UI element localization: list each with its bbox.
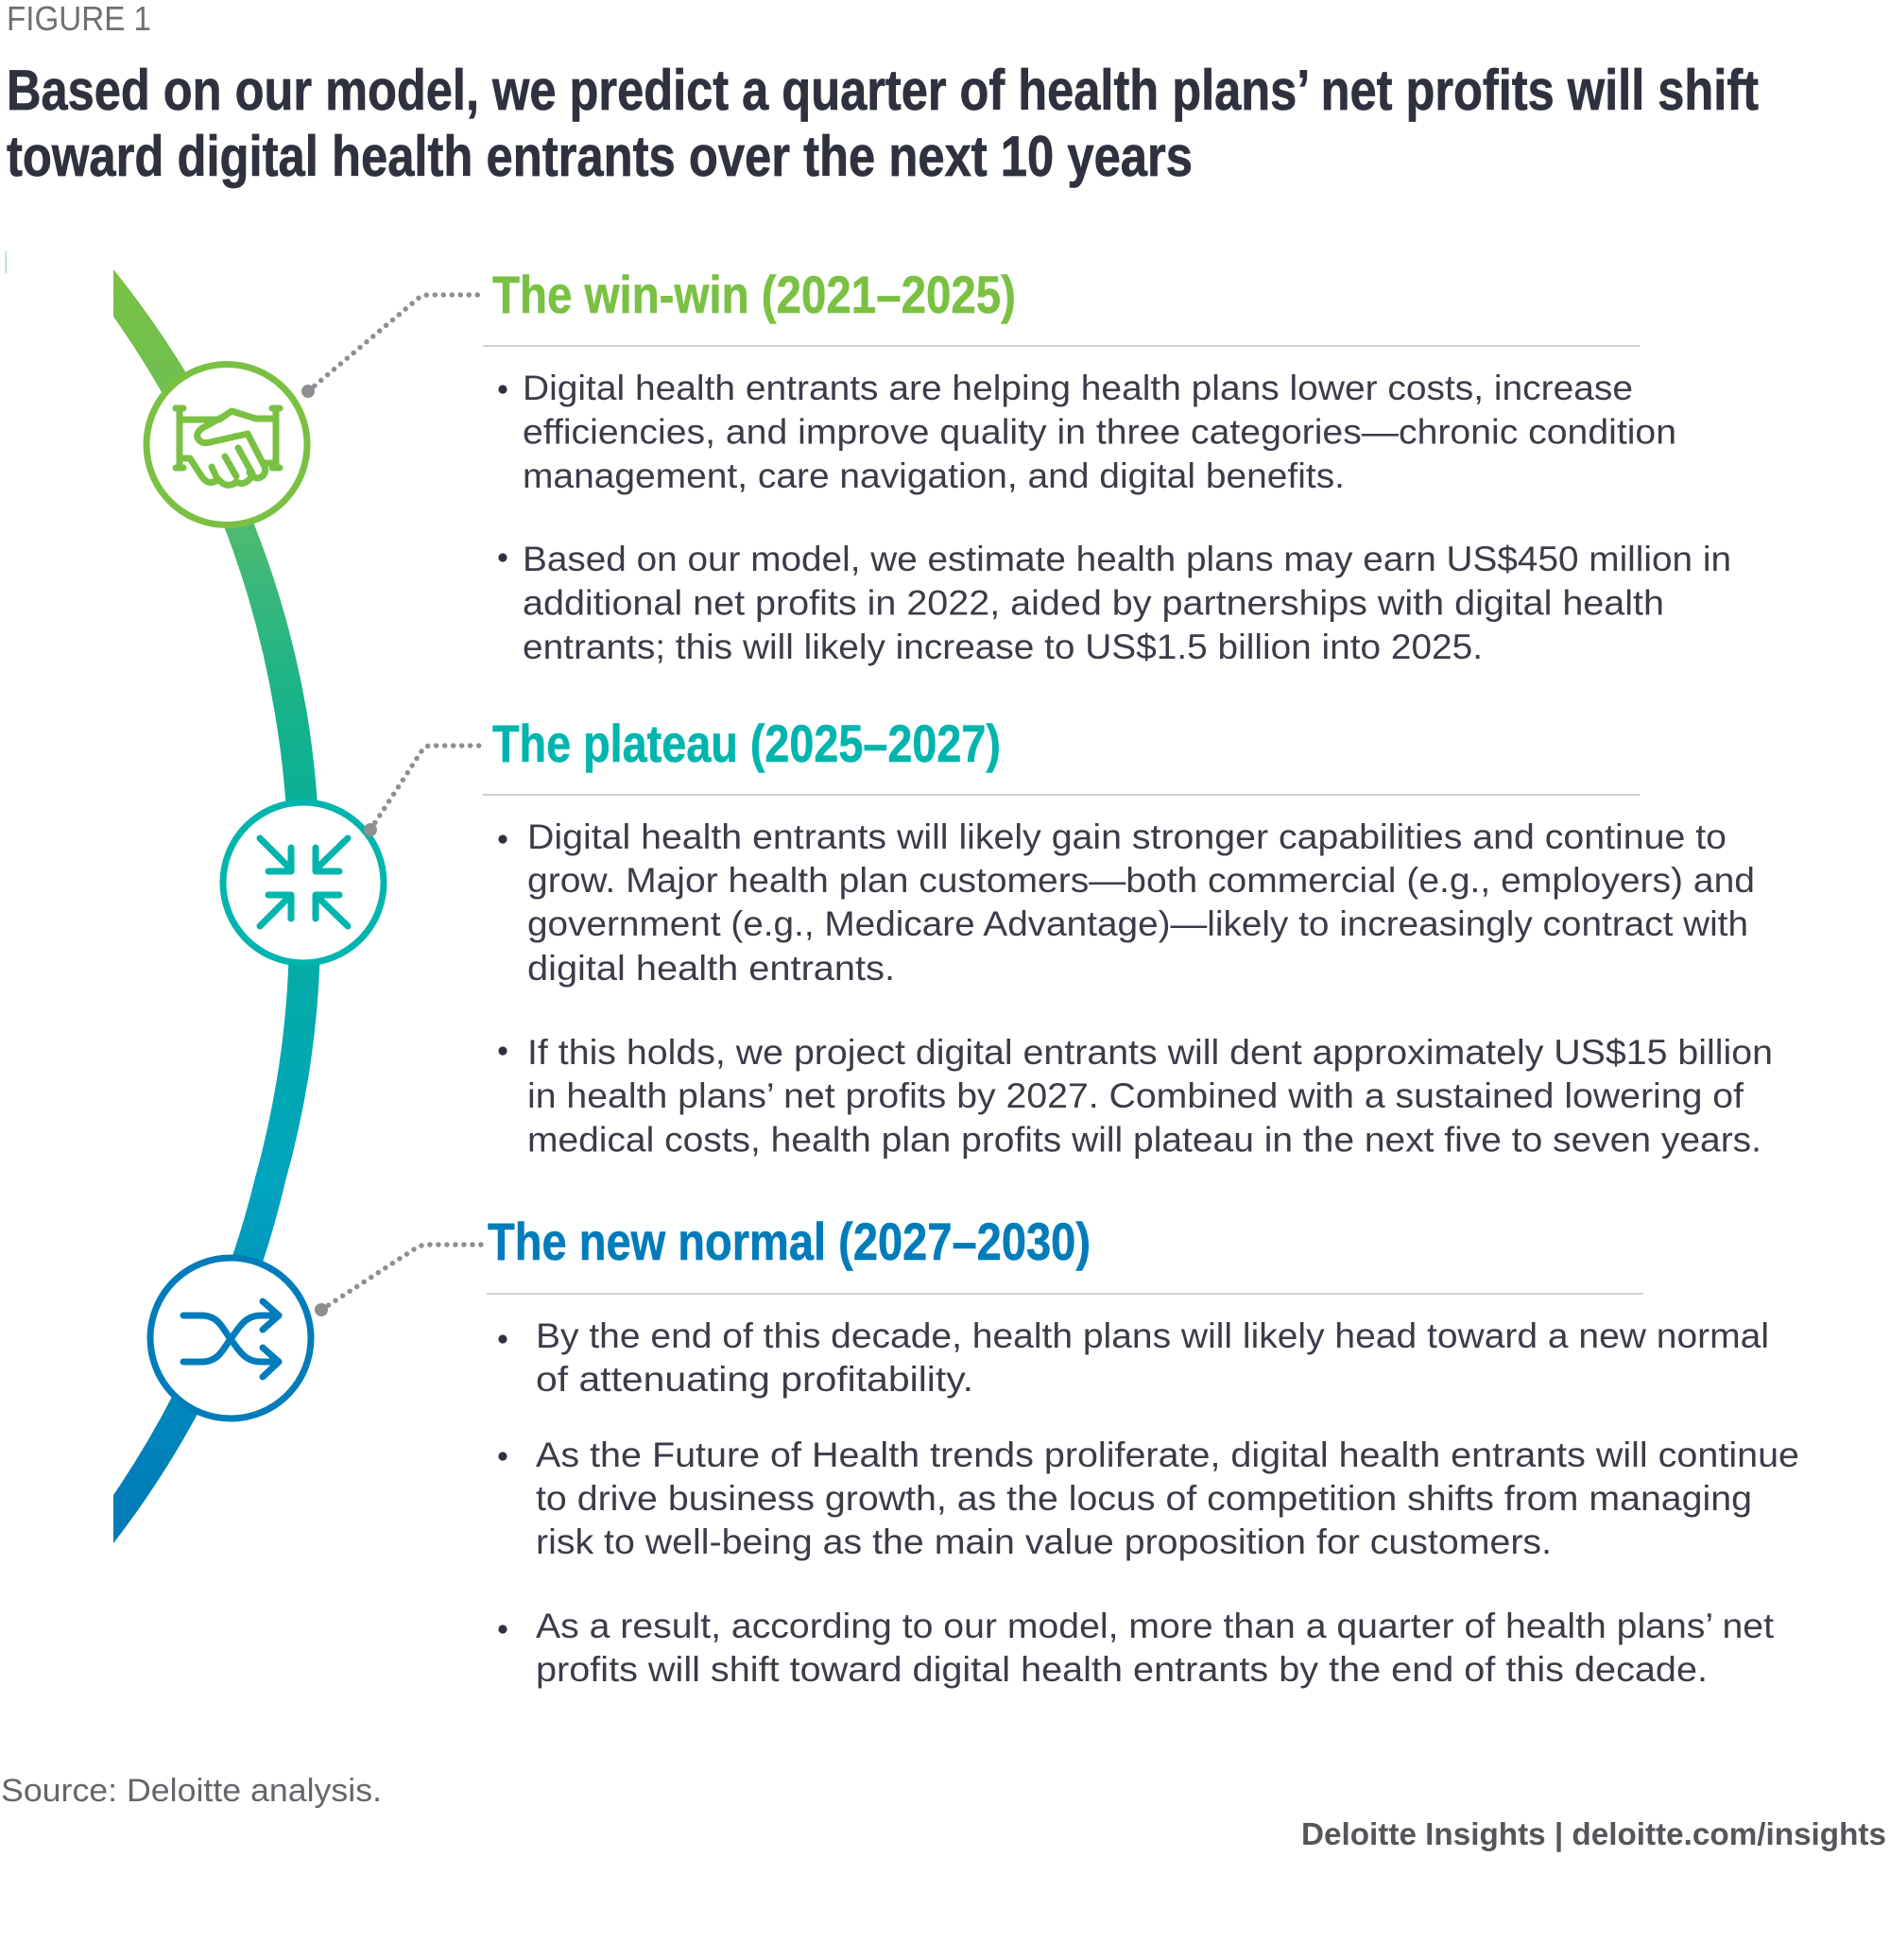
bullet: result: As a result, according to our model, more than a quarter of health plans’ net	[536, 1607, 1775, 1645]
heading: the plateau: The plateau (2025–2027)	[492, 714, 1001, 773]
bullet: new normal: of attenuating profitability.	[536, 1360, 973, 1399]
bullet: capabilities: grow. Major health plan customers—both commercial (e.g., employers) and	[527, 861, 1755, 900]
connector: plateau	[364, 746, 486, 836]
bullet: profits	[498, 540, 1731, 666]
title	[7, 59, 1759, 188]
bullet: dent: If this holds, we project digital entrants will dent approximately US$15 billion	[527, 1033, 1773, 1072]
timeline arc	[113, 269, 320, 1543]
bullet: capabilities: digital health entrants.	[527, 949, 895, 988]
bullet: costs: efficiencies, and improve quality in three categories—chronic condition	[523, 412, 1676, 452]
bullet: profits: Based on our model, we estimate health plans may earn US$450 million in	[523, 540, 1731, 578]
icon: handshake in green circle	[146, 365, 307, 525]
bullet: costs: management, care navigation, and digital benefits.	[523, 456, 1345, 495]
bullet: profits: additional net profits in 2022, aided by partnerships with digital health	[523, 584, 1664, 622]
bullet: result: profits will shift toward digital health entrants by the end of this decade.	[536, 1650, 1708, 1689]
bullet: new normal	[498, 1316, 1769, 1399]
connector: new normal	[315, 1245, 486, 1316]
icon: converging arrows in teal circle	[223, 802, 384, 963]
panel: the win-win	[483, 265, 1731, 666]
icon: shuffle arrows in blue circle	[150, 1258, 311, 1418]
bullet: capabilities: government (e.g., Medicare Advantage)—likely to increasingly contract with	[527, 904, 1748, 943]
label: figure number: FIGURE 1	[7, 0, 151, 38]
bullet: costs: Digital health entrants are helping health plans lower costs, increase	[523, 369, 1633, 407]
bullet: dent: medical costs, health plan profits will plateau in the next five to seven years.	[527, 1121, 1761, 1159]
bullet: capabilities: Digital health entrants will likely gain stronger capabilities and continue to	[527, 817, 1727, 856]
bullet: costs	[498, 369, 1676, 495]
bullet: dent: in health plans’ net profits by 2027. Combined with a sustained lowering of	[527, 1076, 1744, 1115]
source note: Source: Deloitte analysis.	[1, 1773, 382, 1809]
bullet: new normal: By the end of this decade, health plans will likely head toward a new normal	[536, 1316, 1769, 1355]
panel: the plateau	[483, 714, 1773, 1159]
panel: the new normal	[487, 1212, 1799, 1689]
bullet: capabilities	[498, 817, 1755, 988]
bullet: result	[498, 1607, 1775, 1689]
bullet: dent	[498, 1033, 1773, 1159]
heading: the new normal: The new normal (2027–2030)	[488, 1212, 1091, 1271]
title: toward digital health entrants over the next 10 years	[7, 125, 1193, 188]
bullet: future of health: to drive business growth, as the locus of competition shifts from managing	[536, 1479, 1752, 1518]
connector: win-win	[301, 295, 486, 398]
credit: Deloitte Insights | deloitte.com/insights	[1301, 1816, 1886, 1851]
heading: the win-win: The win-win (2021–2025)	[492, 265, 1016, 324]
bullet: future of health: risk to well-being as the main value proposition for customers.	[536, 1522, 1552, 1561]
bullet: profits: entrants; this will likely increase to US$1.5 billion into 2025.	[523, 628, 1483, 666]
bullet: future of health: As the Future of Health trends proliferate, digital health entrants will continue	[536, 1436, 1799, 1474]
bullet: future of health	[498, 1436, 1799, 1561]
